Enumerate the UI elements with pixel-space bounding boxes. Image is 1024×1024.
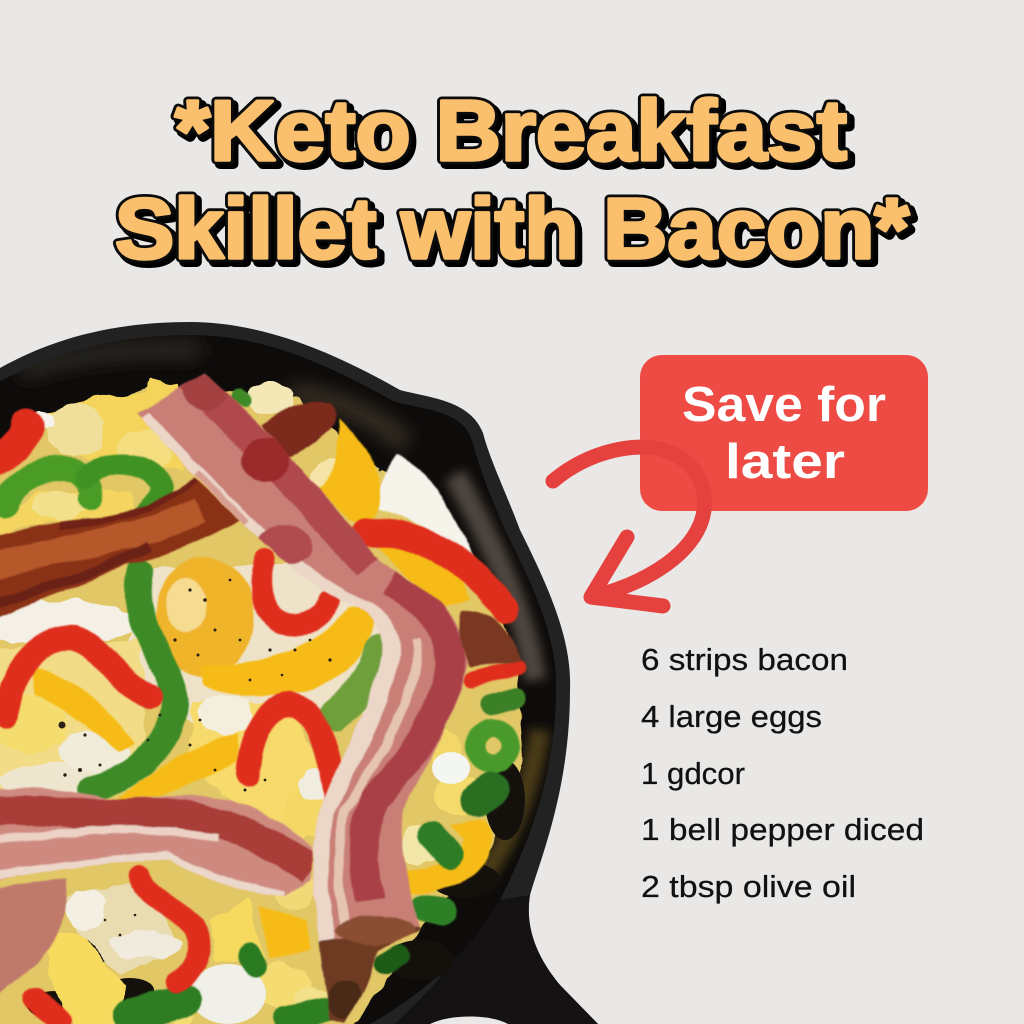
title line 1: *Keto Breakfast: [175, 84, 847, 179]
bacon corner strip: [0, 880, 67, 1010]
ingredient 4: 1 bell pepper diced: [641, 812, 924, 847]
skillet outer body and handle: [0, 322, 598, 1024]
skillet interior: [0, 330, 570, 1024]
scrambled eggs: [0, 378, 484, 1024]
egg yolk: [156, 557, 254, 677]
bacon right piece: [460, 610, 522, 668]
green peppers: [5, 395, 515, 1018]
title line 2: Skillet with Bacon*: [115, 182, 909, 277]
skillet: [0, 322, 598, 1024]
title: [115, 84, 913, 281]
red peppers: [0, 425, 518, 1020]
bacon lower strip: [0, 788, 312, 897]
save for later badge: later: [725, 435, 845, 489]
yellow peppers: [32, 418, 492, 958]
ingredient 3: 1 gdcor: [641, 756, 745, 791]
badge text: Save for: [682, 378, 886, 432]
handle hole: [430, 1016, 508, 1024]
skillet handle shading: [395, 895, 598, 1024]
ingredient 5: 2 tbsp olive oil: [641, 869, 856, 904]
title line 2: Skillet with Bacon*: [115, 182, 909, 277]
food base: [0, 385, 522, 1024]
pepper specks: [58, 469, 381, 936]
dark gaps between food: [27, 760, 525, 1019]
title line 1: *Keto Breakfast: [175, 84, 847, 179]
egg white upper right: [378, 454, 475, 560]
dark bacon top piece: [262, 402, 335, 460]
skillet food: [0, 372, 525, 1024]
ingredients list: [641, 642, 924, 904]
white egg small: [432, 752, 470, 784]
save for later badge: [640, 355, 928, 511]
bacon main strip: [138, 372, 468, 1024]
title line 2: Skillet with Bacon*: [119, 186, 913, 281]
badge box: [640, 355, 928, 511]
interior highlights: [20, 349, 200, 372]
ingredient 1: 6 strips bacon: [641, 642, 848, 677]
dark bacon strip: [0, 402, 335, 640]
ingredient 2: 4 large eggs: [641, 699, 822, 734]
arrow: [553, 447, 705, 606]
title line 1: *Keto Breakfast: [179, 88, 851, 183]
white egg ball: [190, 964, 266, 1024]
